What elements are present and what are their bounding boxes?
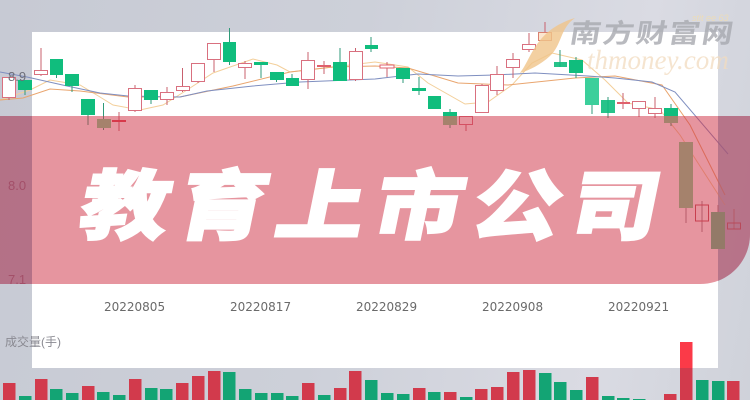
- y axis labels: 8.9: [8, 69, 26, 84]
- banner tint on right margin: [718, 116, 750, 281]
- y axis labels: 8.0: [8, 178, 26, 193]
- x axis date labels: 20220921: [608, 300, 669, 314]
- volume label: 成交量(手): [5, 334, 61, 349]
- x axis date labels: [104, 300, 669, 314]
- candles inside banner: [97, 116, 740, 249]
- x axis date labels: 20220817: [230, 300, 291, 314]
- watermark: site url: thmoney.com: [587, 45, 729, 75]
- pink banner: [0, 116, 750, 284]
- y axis labels: [8, 69, 26, 287]
- y axis labels: 7.1: [8, 272, 26, 287]
- moving average lines: [0, 53, 728, 205]
- watermark: site name: 南方财富网: [568, 19, 738, 48]
- watermark: small tag: stit ee 63: [692, 13, 729, 23]
- x axis date labels: 20220908: [482, 300, 543, 314]
- white chart panel: [32, 32, 718, 368]
- watermark swoosh: [520, 18, 575, 73]
- banner tint on left margin: [0, 116, 32, 284]
- candlesticks: [2, 22, 678, 131]
- volume bars: [3, 370, 740, 400]
- tall volume bar: [680, 342, 692, 400]
- x axis date labels: 20220805: [104, 300, 165, 314]
- title: 教育上市公司: [72, 146, 682, 255]
- x axis date labels: 20220829: [356, 300, 417, 314]
